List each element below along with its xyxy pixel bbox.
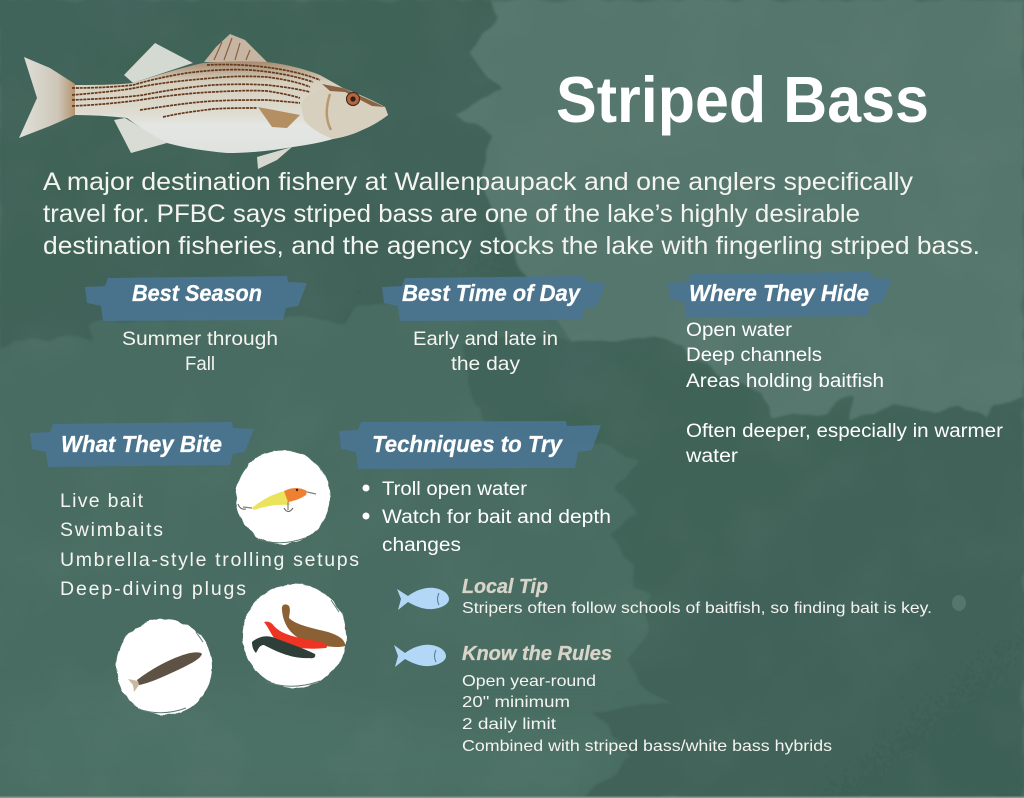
body [75, 61, 388, 153]
callout: know the rules: 20" minimum [462, 694, 570, 711]
heading: What They Bite [61, 431, 222, 457]
intro paragraph [43, 168, 980, 260]
hiding places [685, 320, 1004, 467]
callout: know the rules: 2 daily limit [462, 716, 557, 733]
panel: best time of day [382, 276, 606, 375]
illustration: striped bass fish [19, 34, 388, 169]
bait list: Deep-diving plugs [60, 578, 246, 600]
heading banner [30, 422, 254, 467]
season text [122, 329, 278, 375]
bait list [60, 490, 359, 600]
time text: Early and late in [413, 329, 558, 350]
heading banner [382, 276, 606, 321]
heading banner [339, 421, 601, 469]
callout: know the rules: Combined with striped bass/white bass hybrids [462, 738, 832, 755]
bait list: Umbrella-style trolling setups [60, 549, 359, 571]
callout: local tip: Local Tip [462, 576, 548, 598]
image: live minnow [116, 619, 212, 715]
hiding places: water [685, 446, 739, 467]
bullet list: Troll open water [382, 479, 528, 500]
heading: Best Time of Day [402, 280, 581, 306]
bait list: Swimbaits [60, 519, 163, 541]
head [301, 88, 388, 139]
intro paragraph: A major destination fishery at Wallenpaupack and one anglers specifically [43, 168, 914, 196]
time text: the day [451, 354, 521, 375]
pectoral fin [258, 107, 300, 128]
callout: know the rules: Know the Rules [462, 643, 612, 665]
lateral stripes [72, 65, 320, 117]
icon: blue fish, local tip [397, 588, 449, 610]
callout: know the rules: Open year-round [462, 673, 596, 690]
panel: what they bite [30, 422, 359, 600]
bullet list [362, 479, 611, 556]
bait list: Live bait [60, 490, 144, 512]
intro paragraph: travel for. PFBC says striped bass are one of the lake’s highly desirable [43, 200, 860, 228]
image: soft swimbaits [242, 584, 346, 688]
season text: Fall [185, 354, 215, 375]
heading banner [85, 276, 307, 321]
bullet list: Watch for bait and depth [382, 507, 611, 528]
intro paragraph: destination fisheries, and the agency stocks the lake with fingerling striped bass. [43, 232, 980, 260]
hiding places: Deep channels [686, 345, 822, 366]
callout: local tip: Stripers often follow schools of baitfish, so finding bait is key. [462, 600, 932, 617]
eye [346, 92, 360, 106]
lower fins [114, 118, 292, 169]
season text: Summer through [122, 329, 278, 350]
panel: techniques to try [339, 421, 611, 556]
time text [413, 329, 558, 375]
heading: Techniques to Try [372, 431, 563, 457]
heading banner [668, 272, 892, 318]
heading: Best Season [132, 280, 262, 306]
title: Striped Bass [556, 63, 929, 136]
tail fin [19, 57, 75, 138]
callout: local tip [462, 576, 932, 617]
callout: know the rules [462, 643, 832, 755]
hiding places: Open water [686, 320, 793, 341]
bullet list: changes [382, 535, 461, 556]
hiding places: Areas holding baitfish [686, 371, 884, 392]
dorsal fins [124, 34, 267, 83]
panel: where they hide [668, 272, 1004, 467]
icon: blue fish, know the rules [394, 645, 446, 667]
heading: Where They Hide [689, 280, 869, 306]
hiding places: Often deeper, especially in warmer [686, 421, 1004, 442]
panel: best season [85, 276, 307, 375]
image: crankbait lure [236, 450, 330, 544]
